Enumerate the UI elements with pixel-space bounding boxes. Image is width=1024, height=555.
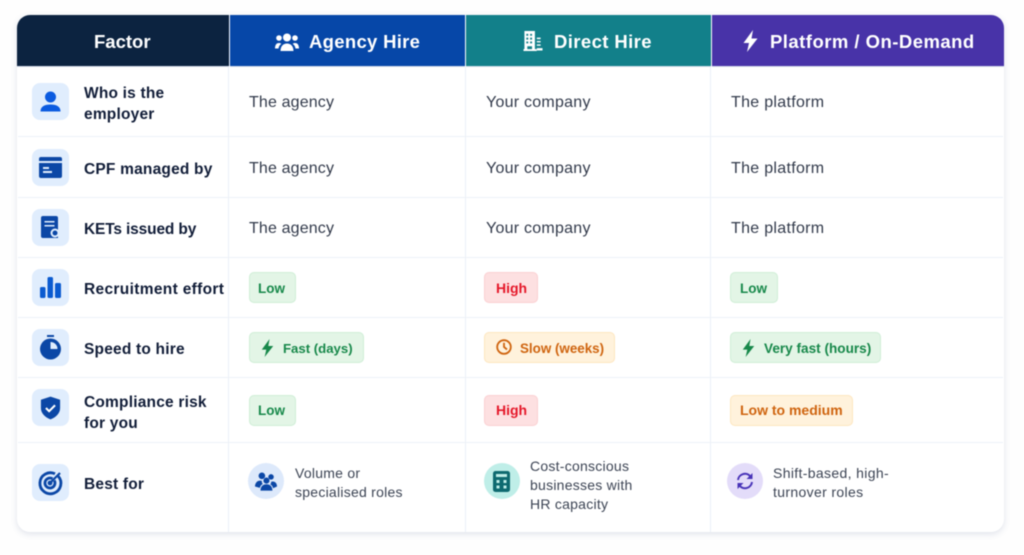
- label: Best for: Best for: [84, 476, 144, 493]
- pill: direct effort high: [484, 272, 538, 303]
- label: CPF managed by: CPF managed by: [84, 161, 213, 178]
- pill: agency fast days: [249, 332, 364, 363]
- pill: direct risk high: [484, 395, 538, 426]
- text: cost-conscious businesses: [530, 458, 633, 513]
- header: Platform / On-Demand: [712, 15, 1004, 67]
- header: Direct Hire: [466, 15, 711, 67]
- pill: platform very fast hours: [730, 332, 881, 363]
- label: Who is the employer: Who is the: [84, 85, 164, 102]
- label: Speed to hire: Speed to hire: [84, 341, 185, 358]
- icon: CPF card: [32, 149, 69, 186]
- header: Factor: [17, 15, 229, 67]
- icon: building: [522, 30, 544, 52]
- text: volume or specialised roles: specialised roles: [295, 484, 403, 500]
- header: Factor: Factor: [94, 31, 151, 52]
- label: Compliance risk for you: [84, 394, 207, 432]
- icon: stopwatch: [32, 329, 69, 366]
- text: cost-conscious businesses: Cost-conscious: [530, 458, 629, 474]
- text: volume or specialised roles: [294, 465, 403, 501]
- pill: agency effort low: [249, 272, 296, 303]
- header: Agency Hire: [230, 15, 465, 67]
- label: KETs issued by: KETs issued by: [84, 221, 196, 238]
- icon: lightning bolt: [743, 30, 758, 52]
- icon: target: [32, 464, 69, 501]
- pill: agency risk low: Low: [258, 403, 285, 418]
- row 1 direct: Your company: [486, 94, 591, 111]
- text: cost-conscious businesses: businesses with: [530, 477, 633, 493]
- row 3 agency: The agency: [249, 220, 334, 237]
- pill: agency risk low: [249, 395, 296, 426]
- icon: bar chart: [32, 269, 69, 306]
- row 2 agency: The agency: [249, 160, 334, 177]
- row 2 direct: Your company: [486, 160, 591, 177]
- label: Who is the employer: [83, 85, 164, 124]
- icon: KET document: [32, 209, 69, 246]
- text: volume or specialised roles: Volume or: [295, 465, 360, 481]
- pill: agency effort low: Low: [258, 281, 285, 296]
- icon: employer person: [32, 83, 69, 120]
- row 3 platform: The platform: [731, 220, 824, 237]
- label: Who is the employer: employer: [84, 106, 155, 123]
- text: shift-based roles: Shift-based, high-: [773, 465, 889, 481]
- best for platform: [727, 463, 763, 499]
- header: Direct Hire: Direct Hire: [554, 31, 652, 52]
- pill: direct slow weeks: Slow (weeks): [520, 341, 604, 356]
- pill: platform effort low: Low: [740, 281, 767, 296]
- row 3 direct: Your company: [486, 220, 591, 237]
- pill: platform very fast hours: Very fast (hours): [764, 341, 871, 356]
- pill: direct effort high: High: [496, 280, 527, 296]
- label: Recruitment effort: Recruitment effort: [84, 281, 224, 298]
- label: Compliance risk for you: Compliance risk: [84, 394, 207, 411]
- icon: people group: [274, 32, 300, 52]
- header: Platform / On-Demand: Platform / On-Demand: [770, 31, 975, 52]
- row 1 platform: The platform: [731, 94, 824, 111]
- label: Compliance risk for you: for you: [84, 415, 138, 432]
- best for direct: [484, 463, 520, 499]
- pill: direct slow weeks: [484, 332, 615, 363]
- text: shift-based roles: [772, 465, 889, 500]
- icon: shield check: [32, 389, 69, 426]
- text: cost-conscious businesses: HR capacity: [530, 496, 608, 512]
- header: Agency Hire: Agency Hire: [309, 31, 420, 52]
- row 2 platform: The platform: [731, 160, 824, 177]
- pill: agency fast days: Fast (days): [283, 341, 353, 356]
- best for agency: [248, 463, 284, 499]
- pill: direct risk high: High: [496, 402, 527, 418]
- pill: platform effort low: [730, 272, 778, 303]
- text: shift-based roles: turnover roles: [773, 484, 864, 500]
- pill: platform risk low to medium: [730, 395, 853, 426]
- row 1 agency: The agency: [249, 94, 334, 111]
- pill: platform risk low to medium: Low to medium: [740, 402, 843, 418]
